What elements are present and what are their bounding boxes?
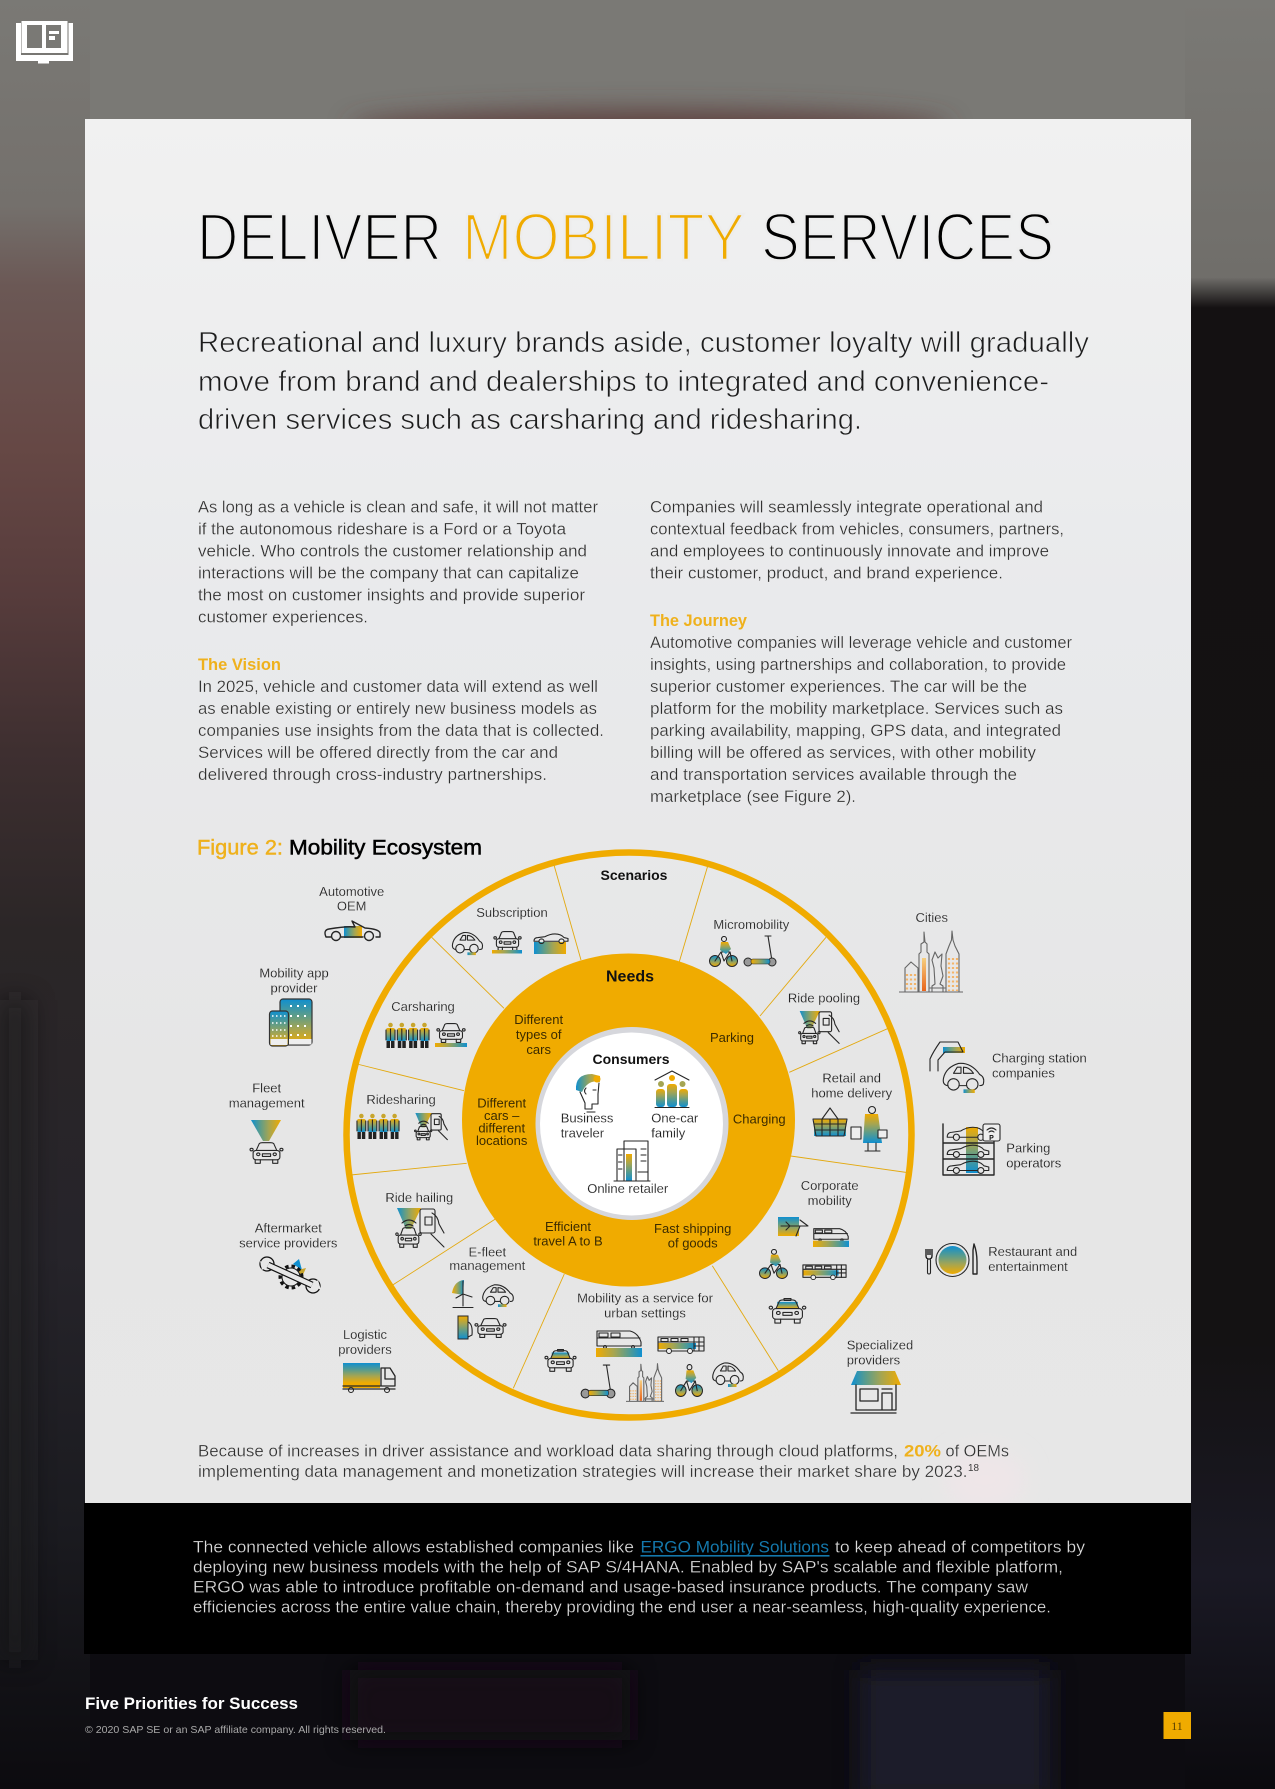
text block: statistic: 20%	[904, 1442, 941, 1461]
needs labels: cars	[526, 1042, 551, 1057]
scenario: subscription	[452, 905, 568, 955]
text block: the vision: The Vision	[198, 655, 281, 674]
lede text: move from brand and dealerships to integrated and convenience-	[198, 366, 1049, 398]
scenario: mobility as a service	[545, 1291, 743, 1401]
text block: statistic: of OEMs	[946, 1442, 1009, 1461]
title: DELIVER	[197, 200, 442, 275]
text block: the vision: Services will be offered directly from the car and	[198, 743, 558, 762]
footer copyright: © 2020 SAP SE or an SAP affiliate company. All rights reserved.	[85, 1724, 386, 1736]
figure heading: Figure 2:	[197, 836, 283, 860]
needs labels: locations	[476, 1133, 528, 1148]
panel: black case study: to keep ahead of competitors by	[835, 1538, 1086, 1557]
partner: parking operators: P	[989, 1135, 994, 1142]
needs labels: Different	[514, 1012, 564, 1027]
label: scenarios: Scenarios	[601, 867, 668, 883]
consumer: business traveler: traveler	[561, 1126, 605, 1141]
text block: right column intro: contextual feedback from vehicles, consumers, partners,	[650, 520, 1064, 539]
scenario: micromobility	[710, 917, 790, 966]
lede text	[198, 327, 1090, 436]
text block: the journey: Automotive companies will leverage vehicle and customer	[650, 633, 1072, 652]
scenario: e-fleet management: management	[449, 1258, 526, 1273]
needs labels: Efficient	[545, 1219, 591, 1234]
partner: aftermarket service providers: Aftermarket	[255, 1221, 322, 1236]
scenario: mobility as a service: Mobility as a service for	[577, 1291, 714, 1306]
text block: the journey: platform for the mobility marketplace. Services such as	[650, 699, 1063, 718]
scenario: mobility as a service: urban settings	[604, 1306, 686, 1321]
scenario: ridesharing	[357, 1092, 447, 1140]
panel: black case study: ERGO was able to introduce profitable on-demand and usage-based insurance products. The company saw	[193, 1578, 1029, 1597]
text block: the journey: billing will be offered as services, with other mobility	[650, 743, 1036, 762]
label: needs: Needs	[606, 969, 654, 986]
scenario: corporate mobility: Corporate	[801, 1178, 859, 1193]
text block: statistic: Because of increases in driver assistance and workload data sharing through cloud platforms,	[198, 1442, 898, 1461]
text block: right column intro: and employees to continuously innovate and improve	[650, 542, 1049, 561]
partner: mobility app provider	[259, 965, 329, 1046]
partner: aftermarket service providers: service providers	[239, 1236, 338, 1251]
page number	[1164, 1712, 1191, 1739]
consumer: online retailer: Online retailer	[587, 1181, 669, 1196]
scenario: retail and home delivery: Retail and	[822, 1070, 881, 1085]
partner: charging station companies	[930, 1042, 1087, 1093]
scenario: subscription: Subscription	[476, 905, 548, 920]
needs labels: cars –	[484, 1108, 520, 1123]
text block: the journey: insights, using partnerships and collaboration, to provide	[650, 655, 1066, 674]
scenario: e-fleet management	[449, 1245, 526, 1339]
partner: aftermarket service providers	[239, 1221, 338, 1293]
needs labels: types of	[516, 1027, 562, 1042]
chart: mobility ecosystem wheel	[346, 852, 912, 1418]
consumer: business traveler: Business	[561, 1111, 614, 1126]
text block: left column intro	[198, 498, 598, 627]
scenario: corporate mobility	[760, 1178, 859, 1323]
partner: logistic providers: providers	[338, 1342, 392, 1357]
partner: restaurant and entertainment: Restaurant and	[988, 1244, 1077, 1259]
title	[202, 214, 1050, 260]
lede text: Recreational and luxury brands aside, customer loyalty will gradually	[198, 327, 1090, 359]
partner: parking operators	[943, 1124, 1062, 1175]
scenario: micromobility: Micromobility	[713, 917, 790, 932]
panel: black case study: efficiencies across the entire value chain, thereby providing the end user a near-seamless, high-quality experience.	[193, 1598, 1051, 1617]
scenario: carsharing	[386, 999, 467, 1048]
needs labels: of goods	[668, 1236, 718, 1251]
footer title: Five Priorities for Success	[85, 1694, 298, 1713]
partner: cities	[899, 910, 963, 992]
partner: mobility app provider: provider	[271, 980, 318, 995]
partner: logistic providers	[338, 1327, 395, 1392]
partner: automotive OEM: OEM	[337, 899, 367, 914]
partner: specialized providers: providers	[847, 1352, 901, 1367]
text block: left column intro: As long as a vehicle is clean and safe, it will not matter	[198, 498, 598, 517]
text block: left column intro: the most on customer insights and provide superior	[198, 586, 585, 605]
needs labels	[476, 1012, 786, 1251]
scenario: ride hailing: Ride hailing	[385, 1190, 453, 1205]
panel: black case study	[84, 1503, 1191, 1654]
partner: fleet management: management	[229, 1096, 305, 1111]
text block: the vision: In 2025, vehicle and customer data will extend as well	[198, 677, 598, 696]
consumer: business traveler	[561, 1074, 614, 1141]
text block: the journey: superior customer experiences. The car will be the	[650, 677, 1027, 696]
consumer: one-car family: family	[651, 1126, 686, 1141]
text block: right column intro	[650, 498, 1064, 583]
page number: 11	[1171, 1719, 1183, 1733]
text block: the journey: marketplace (see Figure 2).	[650, 787, 856, 806]
text block: the journey: The Journey	[650, 611, 748, 630]
partner: fleet management: Fleet	[252, 1081, 282, 1096]
text block: the vision: companies use insights from the data that is collected.	[198, 721, 604, 740]
panel: black case study: ERGO Mobility Solutions	[640, 1538, 829, 1557]
partner: fleet management	[229, 1081, 305, 1163]
scenario: corporate mobility: mobility	[808, 1193, 852, 1208]
text block: statistic: 18	[968, 1463, 979, 1474]
partner: logistic providers: Logistic	[343, 1327, 388, 1342]
text block: the vision	[198, 655, 604, 784]
partner: specialized providers: Specialized	[847, 1337, 913, 1352]
text block: right column intro: Companies will seamlessly integrate operational and	[650, 498, 1043, 517]
needs labels: Parking	[710, 1030, 754, 1045]
consumer: one-car family	[651, 1071, 699, 1141]
partner: specialized providers	[847, 1337, 913, 1413]
panel: main article	[85, 119, 1191, 1510]
panel: black case study: deploying new business models with the help of SAP S/4HANA. Enabled by SAP's scalable and flexible platform,	[193, 1558, 1063, 1577]
needs labels: travel A to B	[533, 1234, 603, 1249]
title: MOBILITY	[462, 200, 745, 275]
icon: open book	[16, 21, 73, 64]
scenario: ride pooling	[788, 990, 860, 1044]
partner: parking operators: operators	[1006, 1155, 1062, 1170]
partner: mobility app provider: Mobility app	[259, 965, 329, 980]
needs labels: Different	[477, 1096, 527, 1111]
partner: restaurant and entertainment	[926, 1244, 1077, 1276]
partner: charging station companies: Charging station	[992, 1050, 1087, 1065]
text block: left column intro: interactions will be the company that can capitalize	[198, 564, 579, 583]
text block: statistic: implementing data management and monetization strategies will increase their market share by 2023.	[198, 1462, 968, 1481]
figure heading: Mobility Ecosystem	[289, 836, 482, 860]
partner: cities: Cities	[915, 910, 948, 925]
lede text: driven services such as carsharing and ridesharing.	[198, 404, 862, 436]
scenario: e-fleet management: E-fleet	[469, 1245, 506, 1260]
partner: parking operators: Parking	[1006, 1140, 1050, 1155]
needs labels: different	[478, 1121, 525, 1136]
consumer: online retailer	[587, 1141, 669, 1196]
scenario: ridesharing: Ridesharing	[366, 1092, 436, 1107]
label: consumers: Consumers	[592, 1051, 670, 1067]
figure heading	[198, 838, 481, 860]
title: SERVICES	[761, 200, 1054, 275]
text block: statistic	[198, 1442, 1009, 1481]
text block: the journey	[650, 611, 1072, 806]
scenario: ride hailing	[385, 1190, 453, 1247]
text block: the vision: as enable existing or entirely new business models as	[198, 699, 597, 718]
text block: the journey: and transportation services available through the	[650, 765, 1017, 784]
partner: restaurant and entertainment: entertainment	[988, 1259, 1068, 1274]
scenario: ride pooling: Ride pooling	[788, 990, 860, 1005]
text block: left column intro: customer experiences.	[198, 608, 368, 627]
panel: black case study: The connected vehicle allows established companies like	[193, 1538, 634, 1557]
text block: left column intro: vehicle. Who controls the customer relationship and	[198, 542, 587, 561]
scenario: carsharing: Carsharing	[391, 999, 455, 1014]
scenario: retail and home delivery: home delivery	[811, 1085, 893, 1100]
needs labels: Fast shipping	[654, 1221, 731, 1236]
partner: automotive OEM	[319, 884, 384, 940]
text block: the journey: parking availability, mapping, GPS data, and integrated	[650, 721, 1061, 740]
needs labels: Charging	[733, 1111, 786, 1126]
partner: automotive OEM: Automotive	[319, 884, 384, 899]
partner: charging station companies: companies	[992, 1065, 1055, 1080]
text block: left column intro: if the autonomous rideshare is a Ford or a Toyota	[198, 520, 567, 539]
text block: the vision: delivered through cross-industry partnerships.	[198, 765, 547, 784]
text block: right column intro: their customer, product, and brand experience.	[650, 564, 1003, 583]
scenario: retail and home delivery	[811, 1070, 893, 1151]
consumer: one-car family: One-car	[651, 1111, 699, 1126]
